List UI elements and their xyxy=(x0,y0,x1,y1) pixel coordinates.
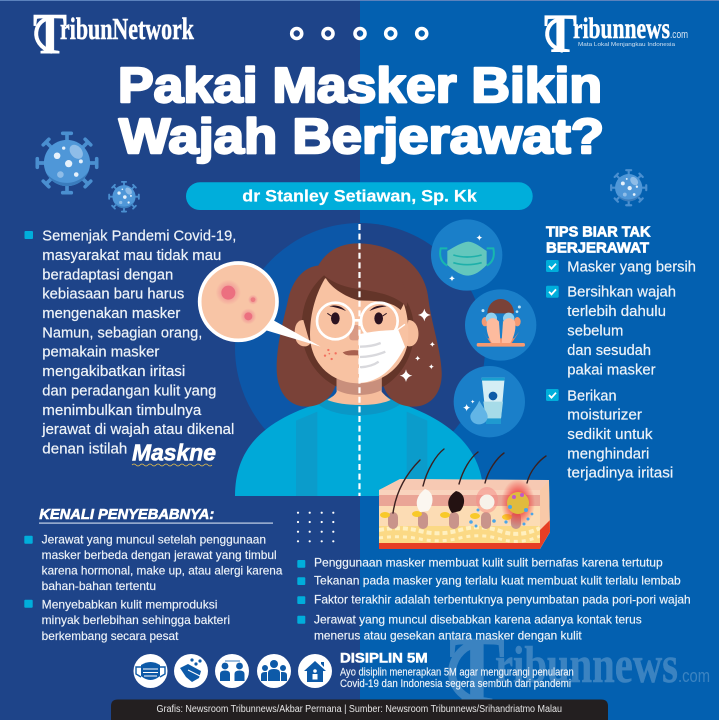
paragraph: intro: mengenakan masker xyxy=(42,305,180,322)
nose xyxy=(349,325,358,340)
icon: surgical mask circle xyxy=(431,219,502,291)
sparkles xyxy=(400,309,435,382)
title xyxy=(118,59,604,164)
title: Pakai Masker Bikin xyxy=(118,59,602,113)
paragraph: intro: Semenjak Pandemi Covid-19, xyxy=(42,228,236,245)
paragraph: intro: kebiasaan baru harus xyxy=(42,286,184,302)
paragraph: intro: mengakibatkan iritasi xyxy=(42,363,185,380)
causes list left: bahan-bahan tertentu xyxy=(42,580,156,593)
tip 2: pakai masker xyxy=(567,361,656,378)
causes list left: Jerawat yang muncul setelah penggunaan xyxy=(42,533,266,546)
tip 3: sedikit untuk xyxy=(567,426,653,443)
logo: Tribunnews xyxy=(544,3,688,64)
paragraph: intro xyxy=(24,228,236,457)
tip 3: Berikan xyxy=(567,387,617,404)
fringe light xyxy=(318,248,407,307)
icon: 5M hand washing xyxy=(174,654,208,688)
sebaceous glands xyxy=(380,511,512,520)
causes list right: Jerawat yang muncul disebabkan karena adanya kontak terus xyxy=(314,613,642,626)
tips heading: TIPS BIAR TAK xyxy=(546,225,651,241)
icon: 5M crowd xyxy=(257,654,291,688)
hairs xyxy=(393,449,546,513)
causes list left: berkembang secara pesat xyxy=(42,630,179,643)
paragraph: intro: beradaptasi dengan xyxy=(42,266,173,283)
neck xyxy=(327,375,391,405)
tip 2: terlebih dahulu xyxy=(567,303,666,320)
author pill: dr Stanley Setiawan, Sp. Kk xyxy=(242,187,477,206)
tip 3: moisturizer xyxy=(567,407,642,424)
icon: 5M mask xyxy=(134,654,168,688)
tip 1: Masker yang bersih xyxy=(567,259,696,276)
icon: face washing circle xyxy=(465,289,536,361)
skin cross-section illustration xyxy=(375,449,555,550)
logo: Tribun Network: T xyxy=(33,1,67,66)
keyword: Maskne: Maskne xyxy=(132,440,216,466)
tips list xyxy=(546,259,696,482)
paragraph: intro: pemakain masker xyxy=(42,344,159,361)
tip 3 xyxy=(546,387,673,482)
acne dots xyxy=(324,349,337,360)
disiplin 5M text: Covid-19 dan Indonesia segera sembuh dari pandemi xyxy=(340,678,571,690)
hair inner shadow xyxy=(302,274,414,387)
watermark: Tribunnews xyxy=(449,616,710,720)
face xyxy=(310,278,408,383)
logo: Tribun Network: ribunNetwork xyxy=(60,11,195,46)
paragraph: intro: denan istilah xyxy=(42,440,127,457)
mask xyxy=(359,324,405,383)
author pill xyxy=(186,182,533,210)
illustration: shirt xyxy=(235,397,483,496)
bacteria dots xyxy=(469,508,533,528)
causes list left: minyak berlebihan sehingga bakteri xyxy=(42,614,230,627)
causes list left: masker berbeda dengan jerawat yang timbul xyxy=(42,549,277,562)
skin layers xyxy=(375,478,555,550)
tips heading: BERJERAWAT xyxy=(546,240,649,256)
causes list left xyxy=(24,533,283,643)
title: Wajah Berjerawat? xyxy=(119,110,604,164)
logo: Tribun Network xyxy=(33,1,195,66)
paragraph: intro: dan peradangan kulit yang xyxy=(42,382,216,400)
logo: Tribunnews: T xyxy=(544,3,577,64)
footer credit bar: Grafis: Newsroom Tribunnews/Akbar Permana | Sumber: Newsroom Tribunnews/Srihandriatmo Malau xyxy=(156,704,562,715)
causes list right: menerus atau gesekan antara masker dengan kulit xyxy=(314,629,582,642)
illustration: backdrop circle xyxy=(235,223,485,432)
paragraph: intro: menimbulkan timbulnya xyxy=(42,402,202,419)
hair back xyxy=(277,243,442,407)
disiplin 5M text: Ayo disiplin menerapkan 5M agar mengurangi penularan xyxy=(340,666,574,678)
icon: moisturizer tube circle xyxy=(454,366,525,437)
logo: Tribunnews: Mata Lokal Menjangkau Indonesia xyxy=(578,42,676,48)
causes list right xyxy=(297,557,691,642)
logo: Tribunnews: .com xyxy=(670,29,688,41)
fringe dark band xyxy=(324,274,405,310)
icon: 5M distancing xyxy=(215,654,249,688)
disiplin 5M text xyxy=(340,651,574,690)
tip 2: dan sesudah xyxy=(567,342,651,359)
causes list left: karena hormonal, make up, atau alergi karena xyxy=(42,564,283,577)
disiplin 5M text: DISIPLIN 5M xyxy=(340,651,428,666)
glasses xyxy=(317,303,398,339)
tips heading xyxy=(546,225,651,256)
tip 2 xyxy=(546,284,676,378)
paragraph: intro: jerawat di wajah atau dikenal xyxy=(41,421,234,438)
icon: large virus xyxy=(37,133,97,193)
dot grid xyxy=(297,512,334,542)
tip 2: sebelum xyxy=(567,322,623,339)
icon: right virus xyxy=(611,170,646,205)
paragraph: intro: masyarakat mau tidak mau xyxy=(42,247,221,264)
icon: 5M stay home xyxy=(298,654,332,688)
magnifier on acne xyxy=(200,263,321,347)
icon: small virus xyxy=(109,182,139,212)
illustration: woman head half masked xyxy=(277,243,442,407)
pores and pimples xyxy=(417,479,535,527)
decorative ring dots xyxy=(292,28,427,38)
follicles xyxy=(388,512,521,529)
watermark: Tribunnews: T xyxy=(449,616,505,720)
ears xyxy=(295,320,419,346)
causes heading: KENALI PENYEBABNYA: xyxy=(39,507,214,523)
tip 3: menghindari xyxy=(567,445,649,462)
logo: Tribunnews: ribunnews xyxy=(573,12,670,45)
causes list left: Menyebabkan kulit memproduksi xyxy=(42,598,217,611)
tip 2: Bersihkan wajah xyxy=(567,284,676,301)
paragraph: intro: Namun, sebagian orang, xyxy=(42,324,202,341)
dashed divider xyxy=(358,224,361,496)
footer credit bar xyxy=(111,700,608,720)
watermark: Tribunnews: .com xyxy=(678,666,710,686)
eyes and brows xyxy=(327,305,387,324)
mouth xyxy=(343,350,358,355)
tip 3: terjadinya iritasi xyxy=(567,465,673,482)
causes list right: Tekanan pada masker yang terlalu kuat membuat kulit terlalu lembab xyxy=(314,574,681,587)
causes list right: Penggunaan masker membuat kulit sulit bernafas karena tertutup xyxy=(314,557,663,570)
causes list right: Faktor terakhir adalah terbentuknya penyumbatan pada pori-pori wajah xyxy=(314,594,691,607)
